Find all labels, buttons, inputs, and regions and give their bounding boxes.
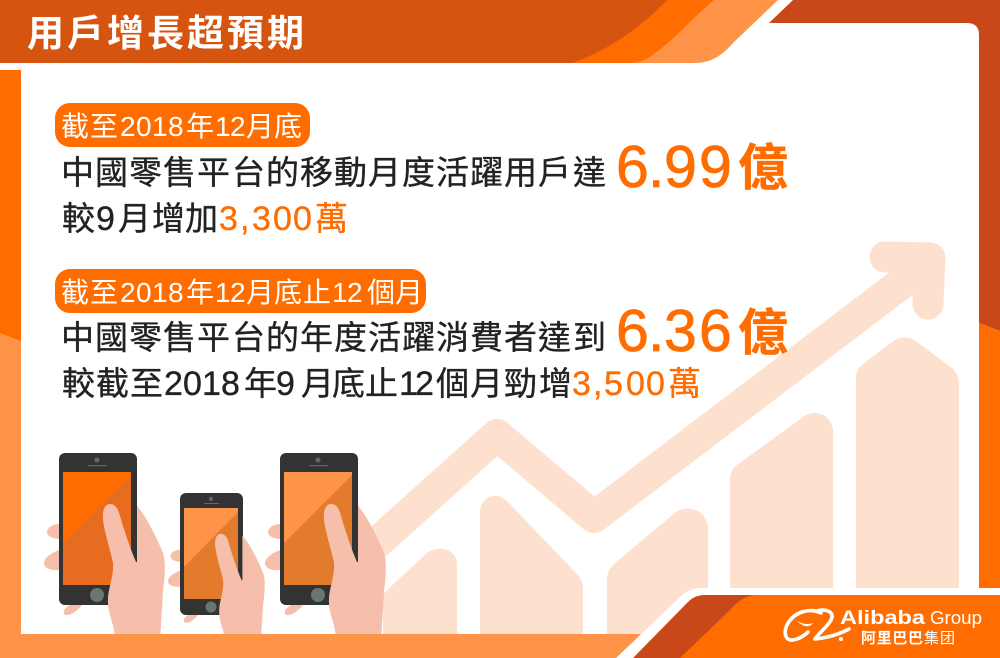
text: increase of 35 million: 3,500: [572, 365, 665, 403]
header: dark band: [0, 0, 667, 63]
header: orange wave: [560, 0, 714, 63]
stat: 6.36: [616, 298, 788, 364]
header banner: [0, 0, 778, 63]
arrow line: [340, 273, 915, 576]
text: increase of 35 million: 較截至: [62, 365, 163, 402]
background frame: left strip upper: [0, 70, 21, 345]
bar 4: [730, 413, 833, 600]
text: increase of 35 million: 萬: [668, 365, 701, 402]
footer: white outline: [616, 588, 1000, 658]
stat: 6.36: 億: [738, 305, 788, 361]
text: increase of 35 million: 年: [244, 365, 277, 402]
text: increase of 35 million: 個月勁增: [436, 365, 572, 402]
logo icon: [785, 610, 849, 641]
bar 2: [480, 496, 583, 634]
logo Chinese name: 阿里巴巴: [861, 630, 923, 647]
badge: twelve months ended December 2018: 截至2018年12月底止12個月: [61, 277, 423, 308]
text: increase of 33 million: 月增加: [118, 200, 218, 237]
chart: bars and rising arrow: [340, 257, 959, 634]
footer banner: [616, 588, 1000, 658]
phone 1 with hand: [44, 453, 165, 640]
text: increase of 35 million: 9: [276, 365, 295, 403]
logo: Alibaba Group: 集团: [924, 630, 955, 647]
stat: 6.99: [616, 134, 788, 200]
text: increase of 35 million: [62, 365, 701, 403]
footer: orange band: [680, 595, 1000, 658]
background frame: bottom strip: [0, 634, 660, 658]
background frame: right strip upper: [769, 0, 1000, 331]
bar 5: [856, 338, 959, 600]
text: increase of 33 million: 9: [96, 200, 115, 238]
phones with hands: [44, 453, 386, 643]
logo: Alibaba Group: [785, 608, 982, 647]
text: mobile MAU line: 中國零售平台的移動月度活躍用戶達: [61, 154, 606, 191]
phone 2 with hand: [168, 493, 265, 643]
logo: Alibaba Group: Group: [930, 608, 982, 628]
background frame: right strip lower: [960, 316, 1000, 600]
stat: 6.99: 6.99: [616, 134, 732, 200]
text: annual active consumers line: 中國零售平台的年度活躍消費者達到: [61, 319, 606, 356]
text: increase of 33 million: 3,300: [219, 200, 312, 238]
text: increase of 33 million: [62, 200, 348, 238]
text: increase of 35 million: 2018: [164, 365, 240, 403]
badge: twelve months ended December 2018: [55, 269, 426, 313]
title: 用戶增長超預期: [27, 3, 304, 57]
background frame: left strip lower: [0, 333, 21, 658]
header: light orange wave: [600, 0, 778, 63]
bar 1: [383, 549, 457, 634]
text: increase of 35 million: 月底止: [301, 365, 398, 402]
stat: 6.36: 6.36: [616, 298, 732, 364]
logo wordmark: Alibaba: [840, 608, 926, 629]
text: increase of 35 million: 12: [399, 365, 434, 403]
bar 3: [607, 509, 708, 634]
badge: as of December 2018: 截至2018年12月底: [61, 111, 302, 142]
phone 3 with hand: [265, 453, 386, 640]
stat: 6.99: 億: [738, 140, 788, 196]
text: increase of 33 million: 較: [62, 200, 95, 237]
arrow head: [885, 257, 930, 304]
text: increase of 33 million: 萬: [315, 200, 348, 237]
badge: as of December 2018: [55, 103, 310, 147]
footer: dark band: [633, 595, 1000, 658]
